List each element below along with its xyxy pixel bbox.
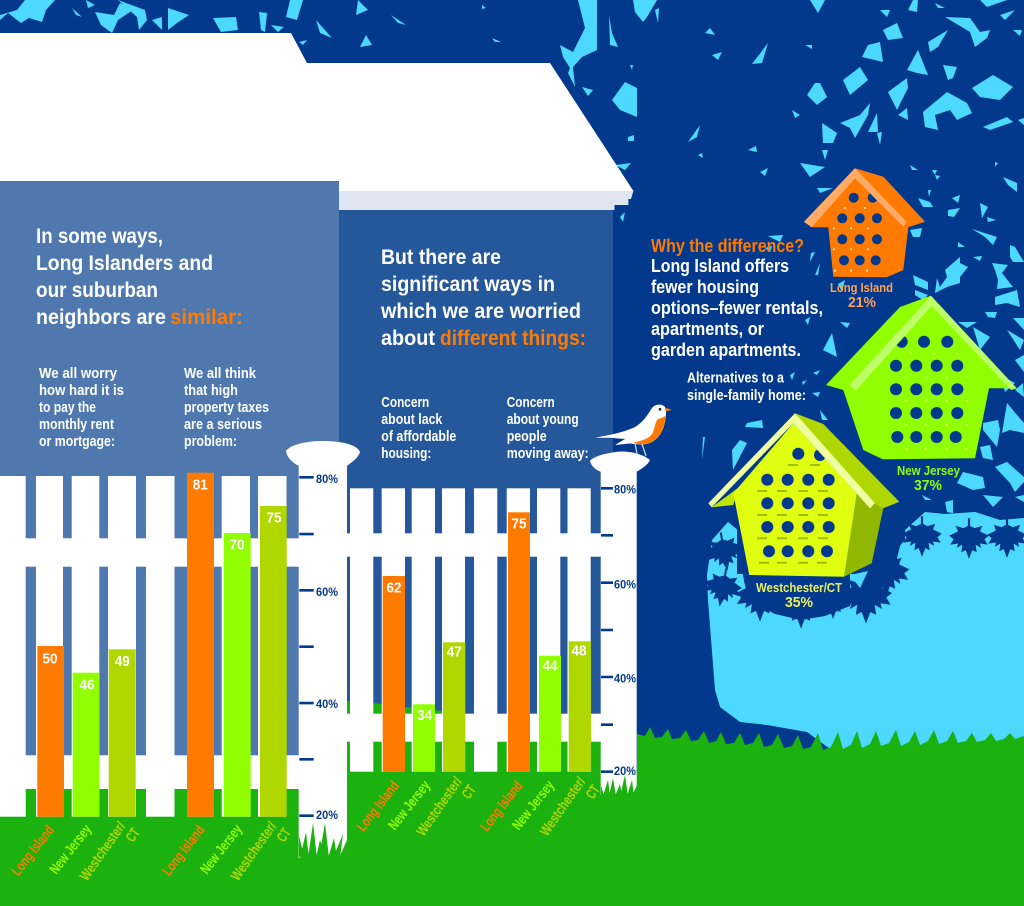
label: Westchester/CT 35%: Westchester/CT	[756, 580, 842, 595]
bar chart: young people moving away	[508, 512, 591, 772]
text block: affordable housing	[381, 395, 456, 462]
text block: young people: about young	[507, 412, 579, 428]
bar chart: lack of affordable housing	[383, 576, 465, 772]
text block: why the difference	[651, 235, 823, 360]
heading: different things: different things:	[440, 326, 586, 350]
left fence post scale: 60%	[316, 587, 338, 599]
heading: similar: similar:	[170, 305, 243, 329]
text block: alternatives	[687, 370, 806, 404]
bar chart: lack of affordable housing: 62	[386, 580, 402, 597]
text block: rent or mortgage: monthly rent	[39, 417, 114, 433]
heading: different things: But there are	[381, 245, 501, 269]
text block: property taxes: are a serious	[184, 417, 262, 433]
left picket fence	[0, 476, 299, 817]
label: New Jersey 37%: 37%	[914, 477, 942, 494]
bar chart: lack of affordable housing: 47	[447, 644, 462, 661]
heading: different things: which we are worried	[380, 299, 581, 323]
rotated bar labels: CT	[123, 825, 144, 845]
rotated bar labels: Long Island	[478, 778, 526, 835]
icon: orange birdhouse, Long Island	[804, 168, 925, 277]
right fence post scale: 20%	[614, 766, 636, 778]
sky seen below the tree canopy	[707, 512, 1024, 760]
rotated bar labels: Westchester/	[414, 774, 466, 839]
text block: affordable housing: Concern	[381, 395, 429, 411]
left fence post scale: 40%	[316, 699, 338, 711]
rotated bar labels: Westchester/	[77, 819, 129, 884]
text block: why the difference: apartments, or	[651, 318, 764, 339]
bar chart: property taxes: 81	[193, 476, 208, 493]
text block: rent or mortgage: We all worry	[39, 366, 117, 382]
right fence post scale: 40%	[614, 674, 636, 686]
text block: young people	[507, 395, 589, 462]
rotated bar labels: Long Island	[160, 823, 208, 879]
rotated bar labels: New Jersey	[47, 822, 95, 877]
text block: property taxes: that high	[184, 383, 238, 399]
text block: alternatives: Alternatives to a	[687, 370, 785, 386]
heading: similar: In some ways,	[36, 224, 163, 248]
text block: why the difference: Long Island offers	[651, 255, 789, 276]
roof trim	[339, 191, 633, 210]
label: Long Island 21%: Long Island	[830, 280, 893, 295]
right fence post scale	[590, 452, 650, 796]
text block: rent or mortgage: or mortgage:	[39, 434, 115, 450]
rotated bar labels: CT	[459, 782, 480, 802]
label: New Jersey 37%	[897, 463, 961, 494]
bar chart: property taxes: 70	[230, 536, 244, 553]
text block: affordable housing: about lack	[381, 412, 443, 428]
roof of the two houses	[0, 33, 633, 191]
heading: similar: Long Islanders and	[36, 251, 213, 275]
label: Long Island 21%	[830, 280, 893, 311]
rotated bar labels: New Jersey	[510, 778, 558, 833]
text block: property taxes: property taxes	[184, 400, 269, 416]
bar chart: monthly rent or mortgage	[37, 646, 136, 817]
bar chart: young people moving away: 48	[572, 643, 586, 660]
grass hill on the right	[0, 727, 1024, 906]
text block: young people: Concern	[507, 395, 555, 411]
icon: lime birdhouse, New Jersey	[826, 296, 1017, 459]
icon: robin on the post	[595, 405, 672, 456]
panel: left house wall	[0, 181, 339, 801]
rotated bar labels: New Jersey	[386, 778, 434, 833]
rotated bar labels: New Jersey	[198, 822, 246, 877]
bar chart: property taxes	[187, 473, 287, 817]
panel: right house wall	[339, 210, 613, 715]
text block: young people: moving away:	[507, 446, 589, 462]
text block: property taxes	[184, 366, 269, 450]
text block: why the difference: garden apartments.	[651, 339, 801, 360]
rotated bar labels: CT	[274, 825, 295, 845]
bar chart: young people moving away: 75	[512, 515, 526, 532]
left fence post scale: 20%	[316, 810, 338, 822]
rotated bar labels: Long Island	[354, 778, 403, 835]
heading: similar	[36, 224, 243, 329]
rotated bar labels: Westchester/	[228, 819, 280, 884]
left fence post scale	[286, 441, 360, 858]
bar chart: lack of affordable housing: 34	[417, 707, 433, 724]
bar chart: monthly rent or mortgage: 46	[80, 676, 94, 693]
bar chart: young people moving away: 44	[542, 658, 558, 675]
bar chart: monthly rent or mortgage: 50	[42, 650, 58, 667]
text block: property taxes: We all think	[184, 366, 257, 382]
label: Westchester/CT 35%: 35%	[785, 594, 813, 611]
maple leaves along the canopy edge	[701, 465, 1024, 629]
right fence post scale: 80%	[614, 484, 636, 496]
heading: different things: about	[381, 326, 435, 350]
foliage shards in the tree canopy	[0, 0, 1024, 513]
label: Westchester/CT 35%	[756, 580, 842, 611]
label: New Jersey 37%: New Jersey	[897, 463, 961, 478]
text block: affordable housing: housing:	[381, 446, 431, 462]
icon: yellow birdhouse, Westchester/CT	[708, 413, 899, 577]
right fence post scale: 60%	[614, 580, 636, 592]
small sky patches inside the lower leaves	[850, 462, 1024, 588]
text block: why the difference: fewer housing	[651, 276, 759, 297]
text block: rent or mortgage	[39, 366, 124, 450]
left fence post scale: 80%	[316, 474, 338, 486]
text block: young people: people	[507, 429, 547, 445]
bar chart: monthly rent or mortgage: 49	[115, 653, 130, 670]
rotated bar labels: Westchester/	[537, 774, 589, 839]
text block: property taxes: problem:	[184, 434, 237, 450]
lawn behind the fences	[0, 701, 601, 819]
right picket fence	[347, 488, 601, 772]
text block: why the difference: Why the difference?	[651, 235, 804, 256]
heading: different things	[380, 245, 586, 350]
heading: similar: neighbors are	[36, 305, 166, 329]
text block: affordable housing: of affordable	[381, 429, 456, 445]
heading: different things: significant ways in	[381, 272, 555, 296]
rotated bar labels: Long Island	[9, 823, 58, 879]
text block: rent or mortgage: to pay the	[39, 400, 96, 416]
heading: similar: our suburban	[36, 278, 158, 302]
rotated bar labels: CT	[583, 782, 604, 802]
text block: rent or mortgage: how hard it is	[39, 383, 124, 399]
bar chart: property taxes: 75	[266, 510, 282, 527]
rotated bar labels	[9, 774, 604, 884]
text block: why the difference: options–fewer rentals,	[651, 297, 823, 318]
label: Long Island 21%: 21%	[848, 294, 876, 311]
text block: alternatives: single-family home:	[687, 388, 806, 404]
